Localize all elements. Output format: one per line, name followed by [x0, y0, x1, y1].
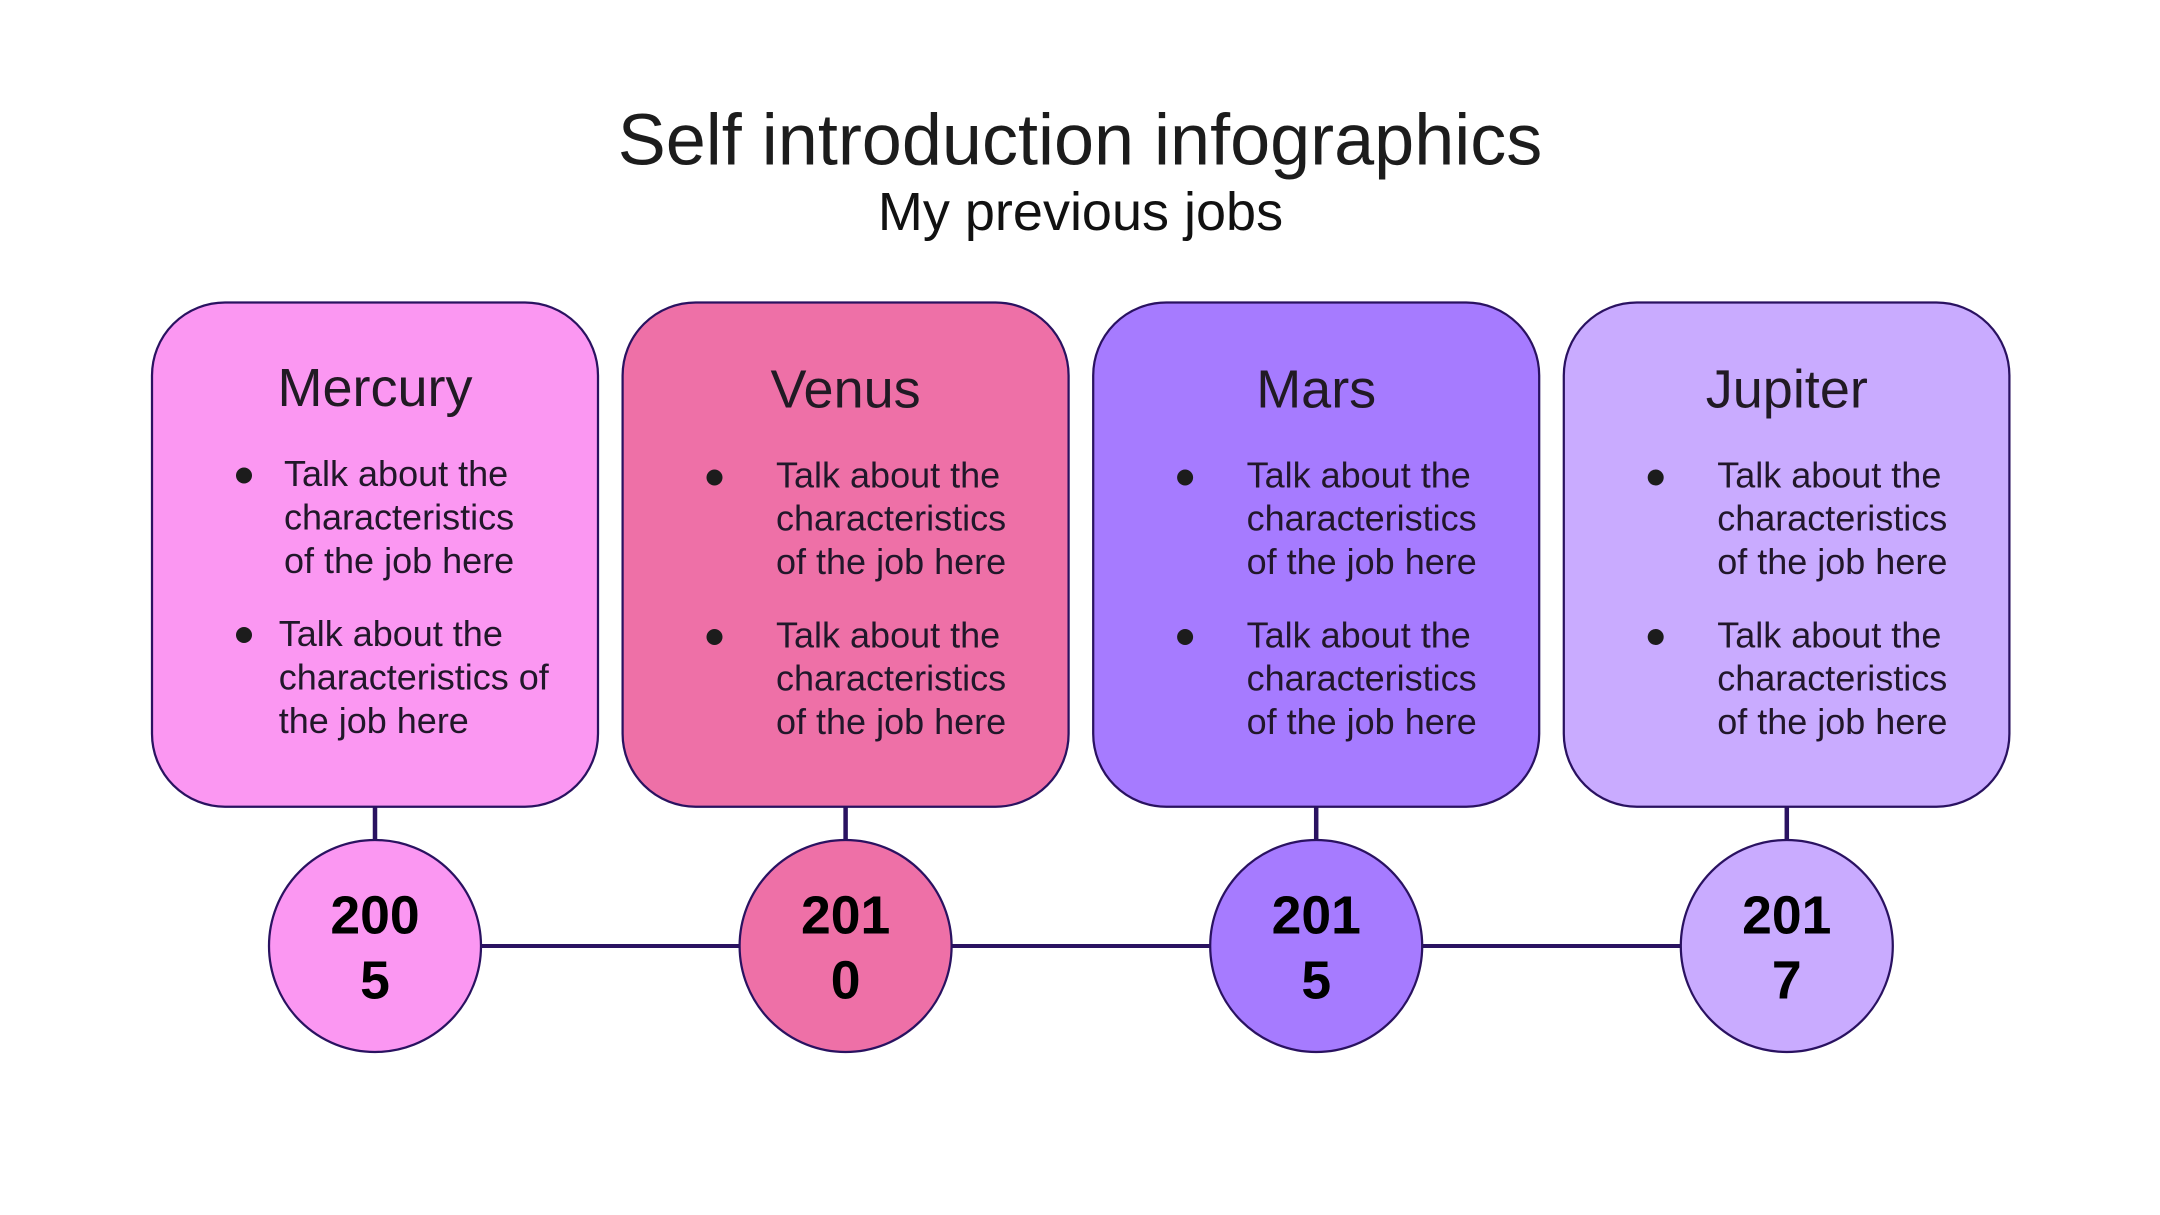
heading: Mercury: Mercury	[277, 358, 473, 418]
year node: 2015: 5	[1301, 952, 1331, 1010]
bullet text 2: characteristics	[1717, 658, 1947, 699]
bullet dot 1	[1177, 470, 1193, 486]
card background: Venus	[623, 302, 1069, 807]
bullet text 1: Talk about the	[1247, 454, 1471, 495]
year node: 2010	[740, 840, 952, 1052]
bullet dot 1	[1648, 470, 1664, 486]
timeline segment 2010 to 2015	[951, 944, 1211, 948]
bullet text 1: of the job here	[1247, 541, 1477, 582]
connector: Mars card to 2015	[1314, 806, 1318, 841]
year node: 2017: 7	[1772, 952, 1802, 1010]
bullet text 1: Talk about the	[284, 453, 508, 494]
bullet text 2: the job here	[279, 700, 469, 741]
card background: Jupiter	[1564, 302, 2009, 807]
bullet text 2: characteristics	[776, 658, 1006, 699]
bullet text 1: characteristics	[1247, 498, 1477, 539]
year node: 2005	[269, 840, 481, 1052]
panel: Mercury	[152, 302, 598, 807]
heading: Jupiter: Jupiter	[1706, 359, 1868, 419]
bullet text 2: of the job here	[1247, 701, 1477, 742]
bullet text 1: of the job here	[284, 540, 514, 581]
heading: Venus: Venus	[771, 359, 921, 419]
year node: 2005: 200	[330, 886, 420, 946]
bullet dot 1	[706, 470, 722, 486]
bullet dot 1	[236, 468, 252, 484]
year node: 2015	[1210, 840, 1422, 1052]
bullet text 2: Talk about the	[279, 613, 503, 654]
year node: 2010: 0	[831, 952, 860, 1010]
panel: Venus	[623, 302, 1069, 807]
year node: 2017	[1681, 840, 1893, 1052]
year node: 2015: 201	[1272, 886, 1361, 946]
bullet text 2: Talk about the	[776, 614, 1000, 655]
title: Self introduction infographics	[618, 100, 1542, 180]
bullet text 2: characteristics	[1247, 658, 1477, 699]
connector: Venus card to 2010	[843, 806, 848, 841]
card background: Mars	[1093, 302, 1539, 807]
bullet text 2: Talk about the	[1717, 614, 1941, 655]
timeline segment 2015 to 2017	[1421, 944, 1682, 948]
panel: Jupiter	[1564, 302, 2009, 807]
bullet text 2: Talk about the	[1247, 614, 1471, 655]
bullet dot 2	[706, 629, 722, 645]
year node: 2005: 5	[360, 952, 390, 1010]
bullet text 1: characteristics	[1717, 498, 1947, 539]
panel: Mars	[1093, 302, 1539, 807]
connector: Jupiter card to 2017	[1785, 806, 1789, 841]
bullet text 2: of the job here	[776, 701, 1006, 742]
bullet dot 2	[236, 627, 252, 643]
bullet text 2: of the job here	[1717, 701, 1947, 742]
heading: Mars: Mars	[1256, 359, 1376, 419]
connector: Mercury card to 2005	[373, 806, 377, 841]
bullet dot 2	[1177, 629, 1193, 645]
subtitle: My previous jobs	[878, 182, 1283, 242]
year node: 2010: 201	[801, 886, 890, 946]
bullet text 1: Talk about the	[1717, 454, 1941, 495]
bullet text 2: characteristics of	[279, 656, 550, 697]
bullet text 1: Talk about the	[776, 454, 1000, 495]
bullet text 1: characteristics	[776, 498, 1006, 539]
year node: 2017: 201	[1742, 886, 1831, 946]
bullet text 1: of the job here	[1717, 541, 1947, 582]
bullet text 1: characteristics	[284, 496, 514, 537]
card background: Mercury	[152, 302, 598, 807]
bullet text 1: of the job here	[776, 541, 1006, 582]
timeline segment 2005 to 2010	[480, 944, 741, 948]
bullet dot 2	[1648, 629, 1664, 645]
